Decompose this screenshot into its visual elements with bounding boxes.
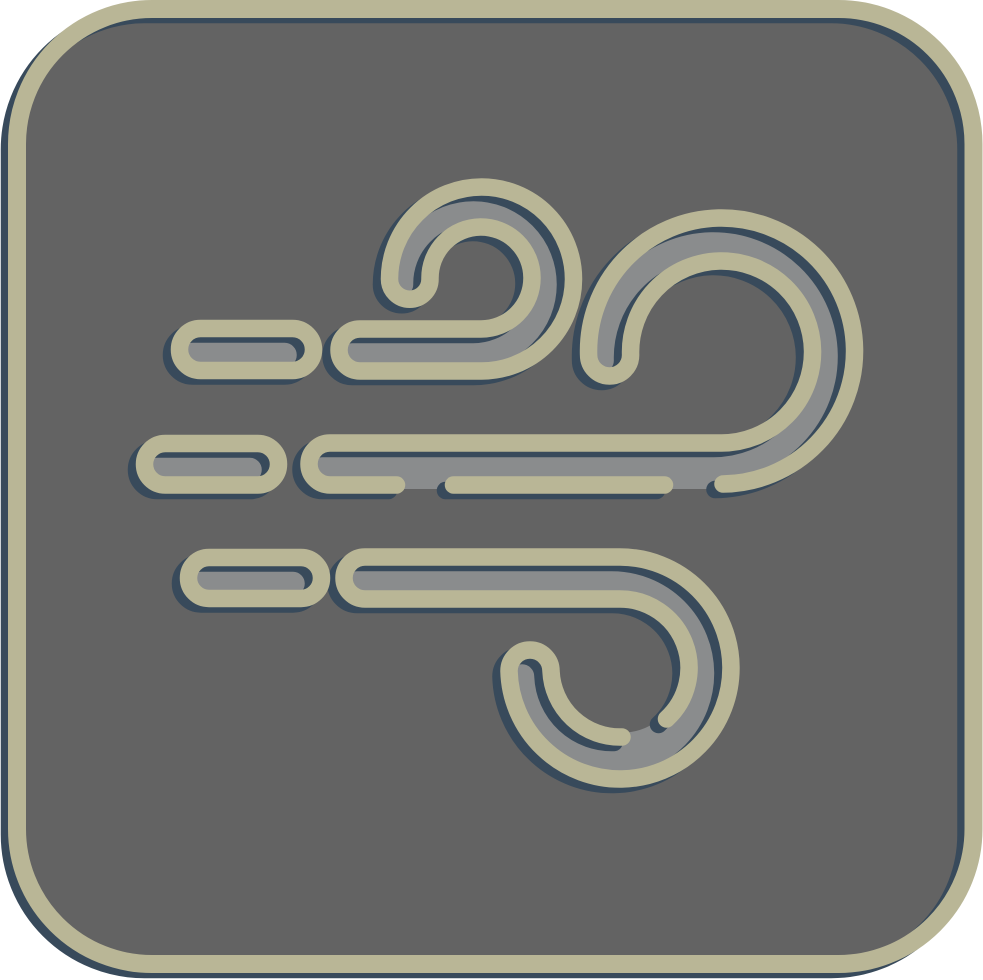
wind dash: top pill [172,328,314,376]
wind dash: bottom pill [180,558,322,604]
wind stream: small upper curl [331,187,574,377]
wind stream: lower hook [336,557,731,784]
wind stream: large upper curl [301,218,855,490]
wind dash: middle pill [136,444,278,490]
